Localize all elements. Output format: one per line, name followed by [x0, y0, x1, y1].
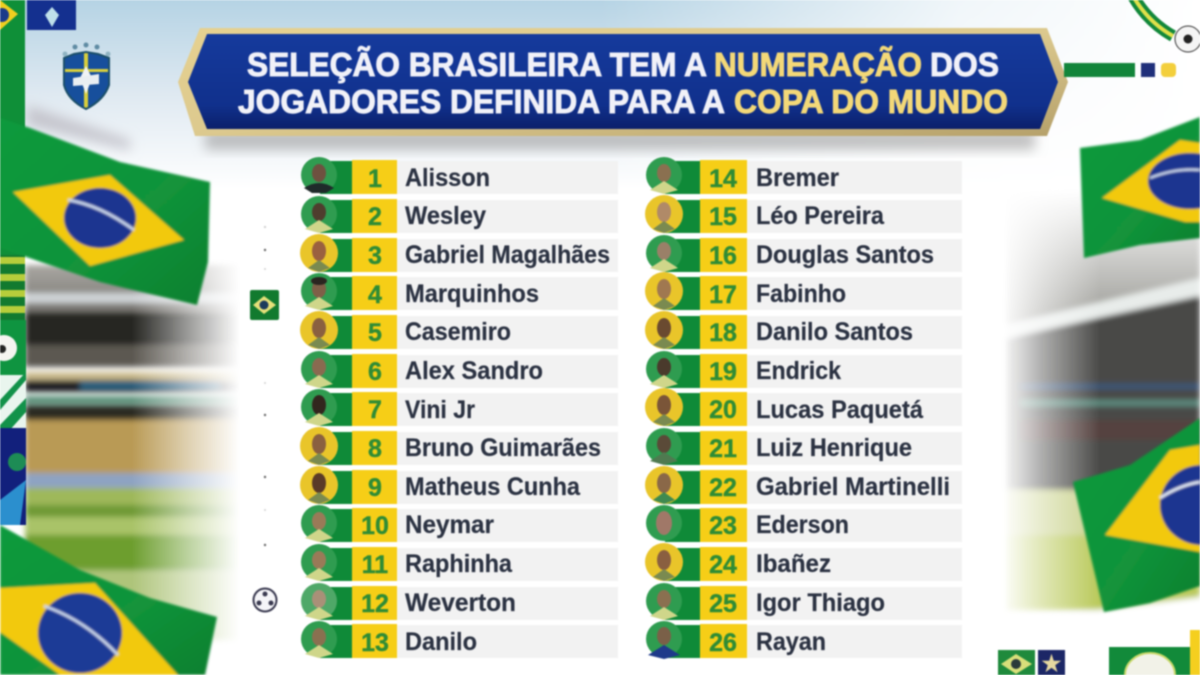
player 3: 3: [368, 242, 382, 270]
panel: players 1-13: [300, 157, 618, 658]
player 1: [301, 157, 618, 194]
player 16: 16: [709, 242, 737, 270]
player 1: 1: [368, 165, 382, 193]
player 8: 8: [368, 435, 382, 463]
title: NUMERAÇÃO: [714, 46, 922, 83]
left decorative strip: [0, 0, 26, 525]
checker pattern: [0, 372, 26, 435]
player 23: Ederson: [756, 511, 849, 539]
player 4: 4: [368, 281, 382, 309]
panel: players 14-26: [645, 157, 962, 659]
icon: strip football: [0, 335, 17, 361]
player 10: [301, 505, 618, 542]
player 6: [301, 351, 618, 388]
player 14: [646, 157, 962, 194]
player 2: [301, 196, 618, 233]
bottom right ball badge: [1109, 630, 1200, 675]
player 17: [645, 272, 962, 310]
title: JOGADORES DEFINIDA PARA A: [238, 83, 725, 120]
player 14: Bremer: [756, 164, 839, 192]
title: COPA DO MUNDO: [734, 83, 1008, 120]
player 18: Danilo Santos: [756, 318, 913, 346]
flag: left bottom: [0, 525, 217, 675]
sky background: [24, 0, 1061, 166]
player 13: [301, 621, 618, 658]
yellow stripes: [0, 255, 25, 325]
player 24: 24: [709, 551, 737, 579]
player 15: 15: [709, 203, 737, 231]
player 16: [646, 235, 962, 272]
player 11: 11: [362, 551, 388, 579]
top right colour bar: [1064, 63, 1176, 77]
player 23: 23: [709, 512, 737, 540]
flag: right top: [1080, 117, 1200, 258]
player 18: 18: [709, 319, 737, 347]
player 20: 20: [709, 396, 737, 424]
diagonal shadow band: [27, 105, 130, 150]
player 19: Endrick: [756, 357, 841, 385]
player 3: [300, 234, 618, 272]
player 7: Vini Jr: [405, 396, 475, 424]
player 22: [645, 466, 962, 504]
player 2: Wesley: [405, 202, 486, 230]
right stadium: [1006, 204, 1200, 614]
player 7: [301, 389, 618, 426]
icon: small flag corner: [0, 0, 18, 30]
navy corner square: [27, 0, 76, 30]
icon: mini flag: [250, 290, 279, 320]
player 26: Rayan: [756, 628, 826, 656]
title: DOS: [930, 46, 999, 83]
player 12: [301, 583, 618, 620]
icon: small football: [254, 588, 276, 612]
player 21: [646, 428, 962, 465]
title banner: [178, 28, 1068, 136]
player 9: 9: [368, 474, 382, 502]
player 21: 21: [709, 435, 737, 463]
player 6: 6: [368, 358, 382, 386]
player 4: Marquinhos: [405, 280, 539, 308]
player 20: [645, 388, 962, 426]
player 2: 2: [368, 203, 382, 231]
player 11: Raphinha: [405, 550, 513, 578]
player 16: Douglas Santos: [756, 241, 934, 269]
icon: CBF crest: [62, 42, 110, 109]
flag: left top: [0, 118, 210, 305]
flag: right bottom: [1073, 418, 1200, 612]
player 9: [300, 466, 618, 504]
player 17: Fabinho: [756, 280, 846, 308]
player 5: 5: [368, 319, 382, 347]
player 19: 19: [709, 358, 737, 386]
player 18: [645, 311, 962, 349]
player 7: 7: [368, 396, 382, 424]
title: SELEÇÃO BRASILEIRA TEM A: [247, 46, 707, 83]
banner shadow: [205, 130, 1035, 150]
player 26: 26: [709, 629, 737, 657]
player 13: 13: [361, 629, 389, 657]
player 14: 14: [709, 165, 737, 193]
player 15: [645, 195, 962, 233]
player 11: [301, 544, 618, 581]
player 4: [301, 273, 618, 310]
player 19: [646, 351, 962, 388]
player 25: 25: [709, 590, 737, 618]
player 8: Bruno Guimarães: [405, 434, 601, 462]
player 5: [300, 311, 618, 349]
decorative dots: [264, 226, 266, 546]
player 9: Matheus Cunha: [405, 473, 581, 501]
player 17: 17: [709, 281, 737, 309]
bottom right flag and star badges: [998, 650, 1065, 675]
player 13: Danilo: [405, 628, 477, 656]
title: [238, 46, 1008, 120]
player 24: [645, 543, 962, 581]
player 1: Alisson: [405, 164, 490, 192]
player 20: Lucas Paquetá: [756, 396, 923, 424]
player 3: Gabriel Magalhães: [405, 241, 610, 269]
player 5: Casemiro: [405, 318, 511, 346]
player 12: Weverton: [405, 589, 516, 617]
player 8: [300, 427, 618, 465]
player 24: Ibañez: [756, 550, 831, 578]
player 21: Luiz Henrique: [756, 434, 912, 462]
player 22: Gabriel Martinelli: [756, 473, 950, 501]
left stadium: [25, 265, 245, 640]
player 10: 10: [361, 512, 389, 540]
player 12: 12: [361, 590, 389, 618]
player 26: [646, 621, 962, 659]
blue pattern: [0, 428, 26, 525]
player 22: 22: [709, 474, 737, 502]
player 6: Alex Sandro: [405, 357, 543, 385]
player 10: Neymar: [405, 511, 494, 539]
top right arc and football: [1133, 0, 1200, 52]
player 23: [646, 505, 962, 542]
player 15: Léo Pereira: [756, 202, 885, 230]
player 25: [646, 583, 962, 620]
player 25: Igor Thiago: [756, 589, 885, 617]
